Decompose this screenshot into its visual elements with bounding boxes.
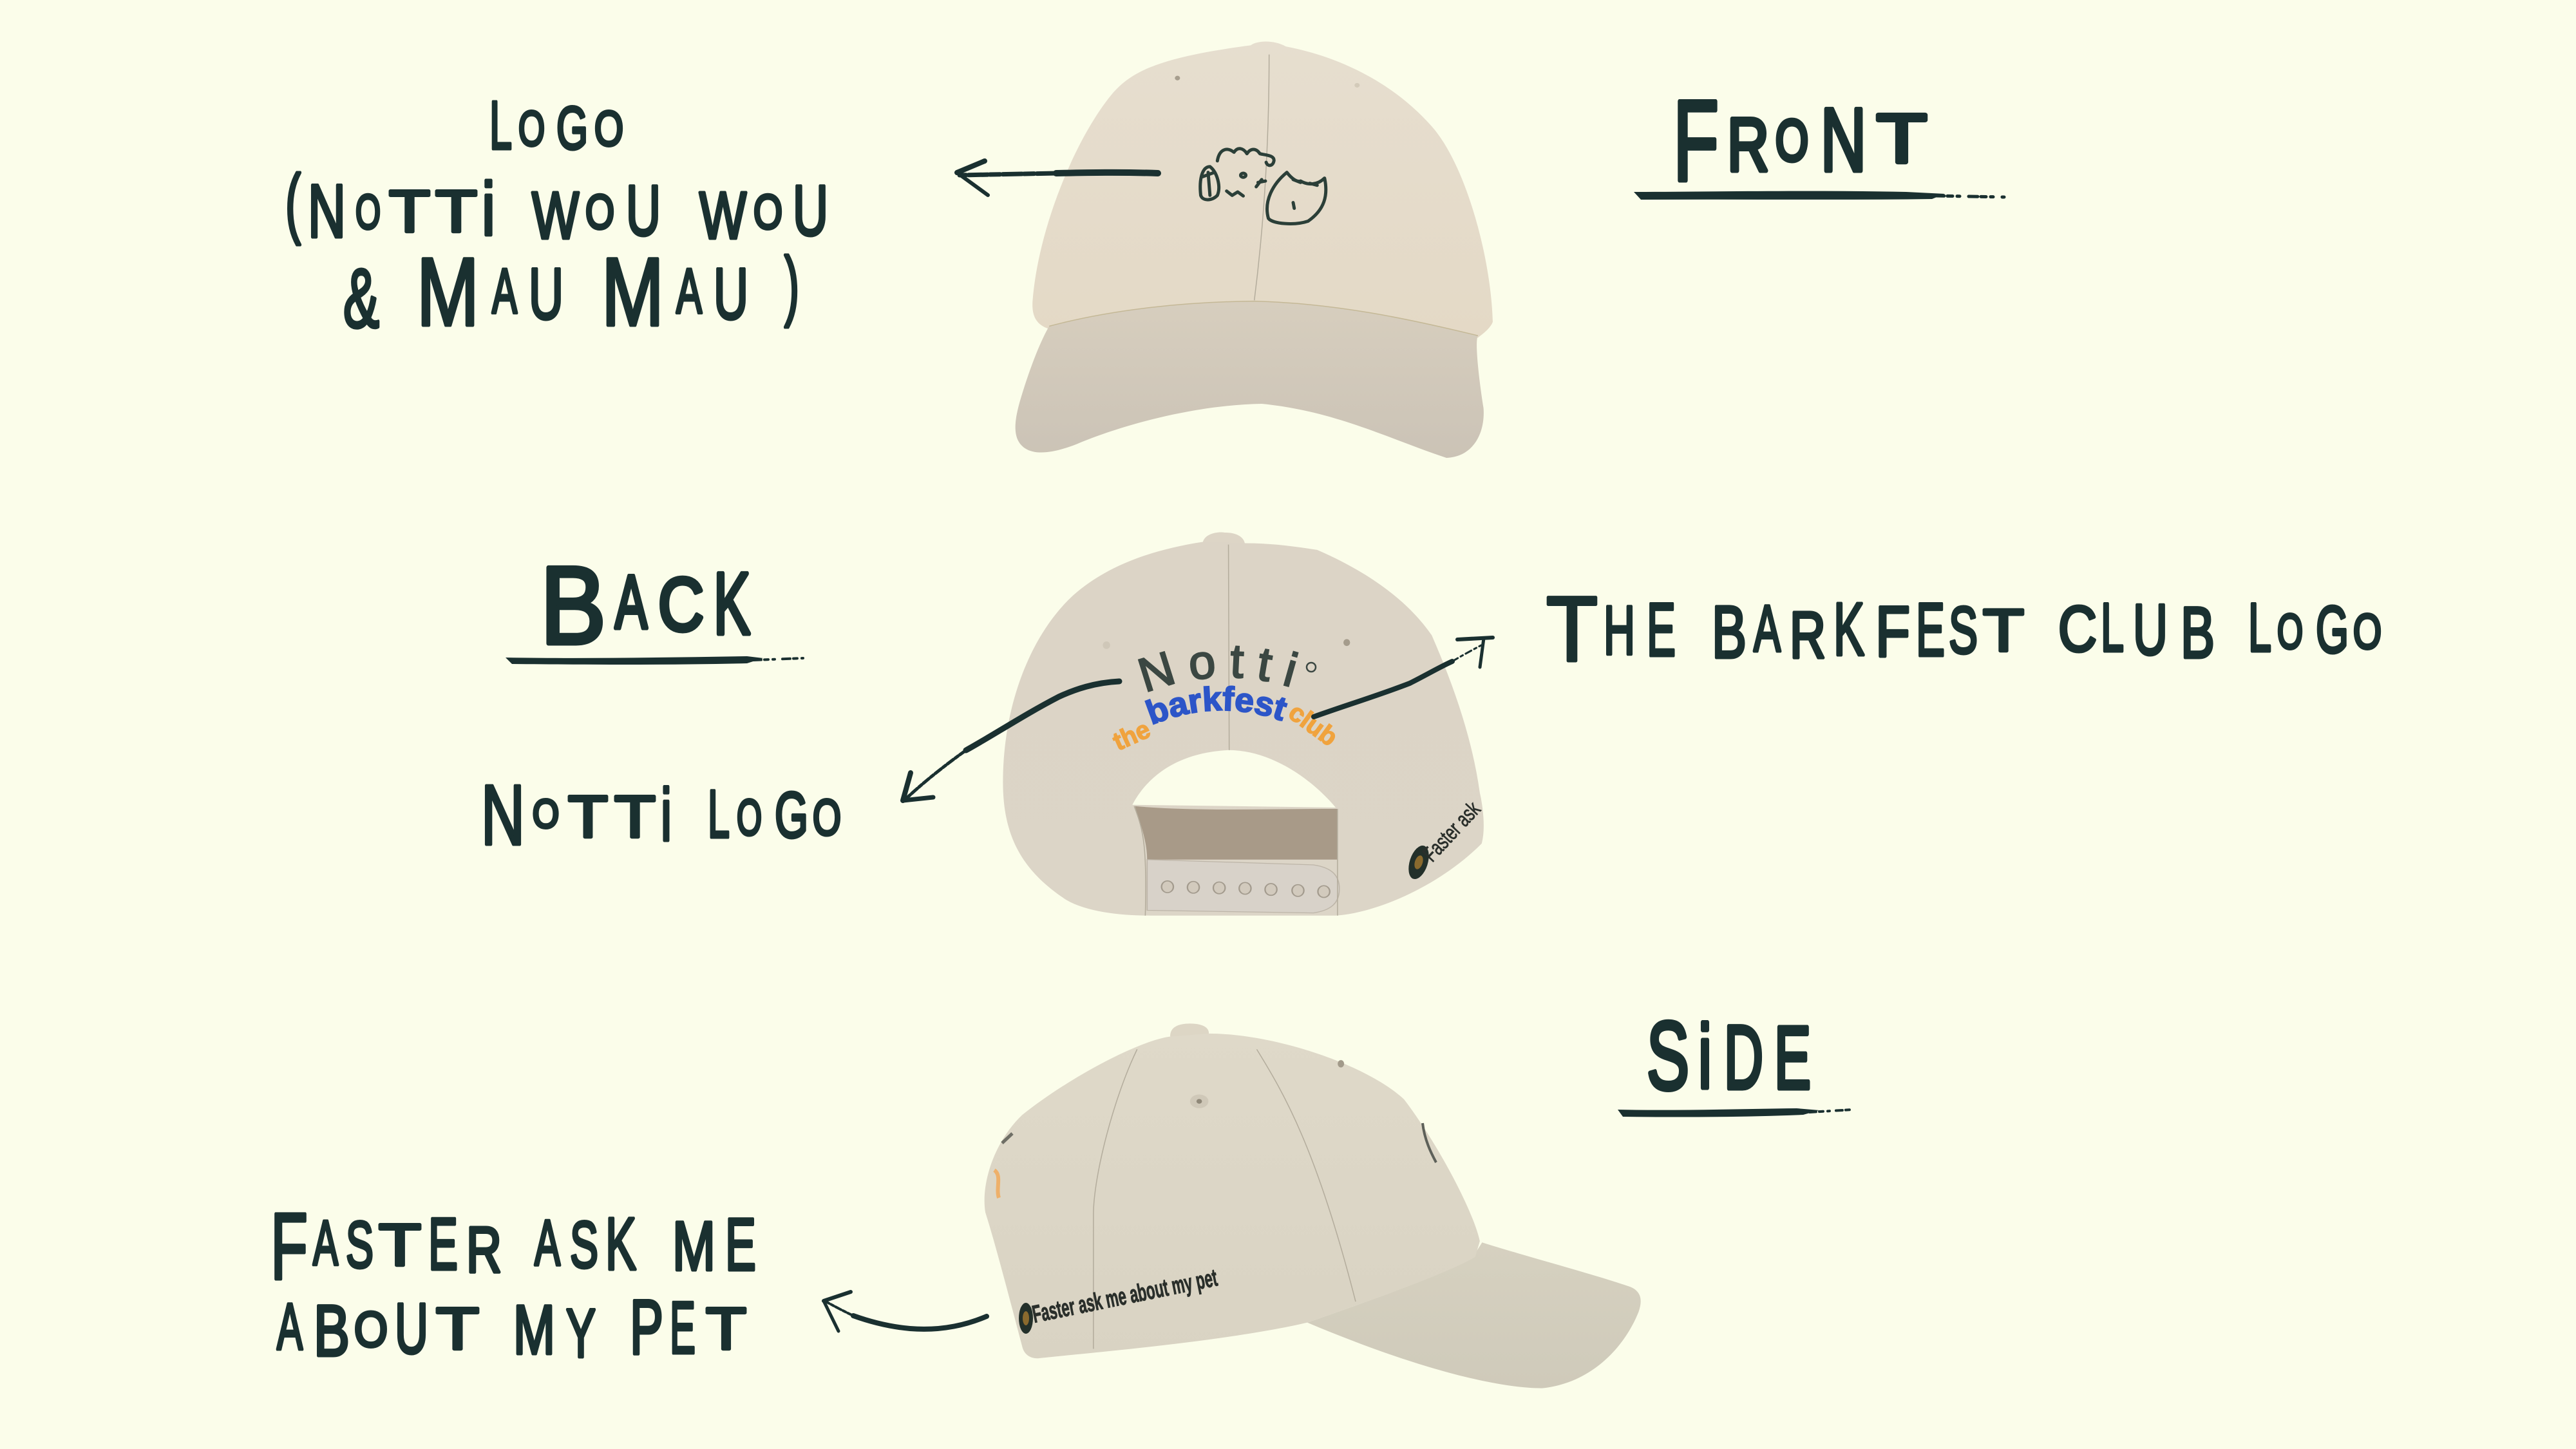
- heading: Notti logo label: G: [775, 779, 808, 851]
- heading: Faster ask me about my pet label: A: [535, 1207, 560, 1279]
- heading: The barkfest club logo label: A: [1754, 592, 1781, 665]
- heading: Front: F: [1673, 77, 1719, 205]
- heading: The barkfest club logo label: T: [1983, 597, 2024, 664]
- heading: Logo label: U: [626, 171, 661, 251]
- heading: Faster ask me about my pet label: E: [428, 1204, 458, 1285]
- embroidery: barkfest edge: [994, 1170, 999, 1198]
- heading: Faster ask me about my pet label: O: [354, 1302, 388, 1358]
- heading: Back: A: [615, 560, 647, 644]
- heading: Back: C: [658, 562, 704, 647]
- embroidery: the barkfest club logo: the: [1109, 715, 1155, 756]
- heading: Faster ask me about my pet label: M: [513, 1291, 555, 1368]
- crown: [985, 1034, 1480, 1358]
- heading: Side: E: [1774, 1009, 1811, 1108]
- heading: Side: i: [1698, 1006, 1712, 1107]
- hat: front view: [1016, 42, 1493, 458]
- heading: Front: O: [1776, 109, 1808, 173]
- heading: Logo label: O: [753, 185, 782, 239]
- heading: Logo label: &: [343, 251, 379, 345]
- heading: Logo label: L: [489, 88, 512, 164]
- crown button: [1170, 1023, 1209, 1037]
- embroidery: Faster ask me side text: [1405, 797, 1486, 882]
- embroidery: Faster ask me about my pet: [1019, 1264, 1220, 1334]
- heading: Logo label: T: [435, 179, 477, 245]
- heading: Notti logo label: T: [568, 784, 608, 850]
- heading: The barkfest club logo label: B: [2181, 592, 2215, 673]
- heading: Logo label: A: [492, 256, 517, 327]
- underline: Side: [1618, 1108, 1853, 1117]
- heading: Logo label: O: [594, 102, 623, 156]
- heading: Faster ask me about my pet label: P: [630, 1284, 663, 1370]
- heading: Logo label: O: [518, 102, 545, 156]
- heading: Front: N: [1821, 90, 1866, 190]
- heading: Front: T: [1877, 100, 1927, 177]
- heading: Faster ask me about my pet label: T: [706, 1296, 746, 1362]
- heading: Faster ask me about my pet label: Y: [566, 1294, 596, 1372]
- heading: The barkfest club logo label: G: [2316, 592, 2349, 667]
- underline: Front: [1634, 191, 2004, 200]
- heading: Front: [1673, 77, 1927, 205]
- crown: [1032, 42, 1493, 337]
- embroidery: the barkfest club logo: [1109, 685, 1343, 756]
- heading: Faster ask me about my pet label: R: [466, 1214, 502, 1286]
- embroidery: the barkfest club logo: barkfest: [1144, 685, 1288, 725]
- heading: Side: S: [1647, 1001, 1689, 1110]
- embroidery: Faster ask me side text: Faster ask: [1418, 797, 1486, 866]
- heading: Faster ask me about my pet label: U: [395, 1289, 428, 1368]
- heading: Faster ask me about my pet label: T: [379, 1213, 421, 1278]
- heading: Faster ask me about my pet label: S: [346, 1208, 374, 1282]
- heading: The barkfest club logo label: T: [1546, 578, 1598, 681]
- arrow: Faster ask me pointer: [824, 1292, 987, 1331]
- heading: Notti logo label: i: [661, 774, 672, 857]
- heading: Faster ask me about my pet label: [270, 1194, 756, 1372]
- heading: The barkfest club logo label: H: [1604, 591, 1635, 669]
- heading: Back: [540, 544, 750, 667]
- heading: Logo label: T: [389, 179, 430, 245]
- heading: Logo label: (: [285, 159, 301, 245]
- heading: Logo label: N: [308, 169, 346, 253]
- heading: Notti logo label: L: [708, 777, 730, 852]
- heading: Faster ask me about my pet label: A: [313, 1208, 338, 1278]
- heading: The barkfest club logo label: C: [2058, 593, 2097, 665]
- strap opening: [1132, 750, 1336, 808]
- heading: Back: B: [540, 544, 606, 667]
- arrow: barkfest club logo pointer: [1314, 638, 1493, 717]
- heading: Logo label: [285, 88, 828, 346]
- heading: Logo label: i: [482, 167, 495, 251]
- heading: The barkfest club logo label: E: [1647, 587, 1676, 672]
- heading: Front: R: [1727, 102, 1769, 187]
- heading: The barkfest club logo label: L: [2101, 589, 2124, 666]
- inner band: [1135, 806, 1338, 860]
- hat: back view: [1003, 532, 1486, 916]
- heading: Notti logo label: T: [614, 784, 656, 850]
- heading: Logo label: M: [601, 238, 664, 346]
- heading: The barkfest club logo label: B: [1712, 591, 1747, 674]
- heading: Logo label: M: [417, 238, 479, 346]
- heading: Side: D: [1724, 1007, 1763, 1108]
- heading: Faster ask me about my pet label: B: [314, 1291, 350, 1371]
- heading: Faster ask me about my pet label: S: [570, 1208, 598, 1282]
- crown button: [1202, 532, 1245, 546]
- heading: The barkfest club logo label: O: [2353, 605, 2382, 659]
- heading: Faster ask me about my pet label: K: [605, 1203, 636, 1285]
- brim: [1016, 301, 1484, 458]
- heading: Faster ask me about my pet label: M: [672, 1207, 715, 1285]
- heading: The barkfest club logo label: K: [1833, 587, 1864, 671]
- heading: Notti logo label: O: [737, 789, 762, 846]
- embroidery: front logo edge: [1423, 1123, 1436, 1162]
- heading: Logo label: W: [532, 178, 579, 252]
- heading: Logo label: U: [714, 254, 748, 334]
- arrow: logo pointer: [957, 161, 1158, 195]
- heading: Notti logo label: O: [533, 792, 559, 837]
- heading: Logo label: U: [793, 171, 828, 251]
- arrow: Notti logo pointer: [903, 681, 1119, 800]
- heading: Faster ask me about my pet label: T: [436, 1296, 479, 1362]
- heading: Faster ask me about my pet label: E: [725, 1204, 756, 1286]
- heading: Notti logo label: O: [813, 789, 841, 846]
- embroidery: Notti logo: Notti: [1137, 645, 1298, 692]
- strap: [1147, 860, 1340, 913]
- heading: Faster ask me about my pet label: F: [270, 1194, 308, 1300]
- heading: Notti logo label: N: [481, 768, 525, 862]
- heading: Faster ask me about my pet label: A: [277, 1290, 303, 1363]
- heading: The barkfest club logo label: F: [1875, 592, 1910, 672]
- heading: The barkfest club logo label: U: [2133, 590, 2168, 670]
- heading: Faster ask me about my pet label: E: [670, 1287, 696, 1369]
- heading: Logo label: U: [529, 254, 564, 334]
- heading: Logo label: G: [556, 94, 588, 162]
- heading: Logo label: ): [784, 242, 799, 328]
- heading: The barkfest club logo label: L: [2248, 589, 2271, 666]
- embroidery: the barkfest club logo: club: [1283, 698, 1343, 752]
- heading: The barkfest club logo label: E: [1916, 587, 1945, 672]
- brim: [1307, 1242, 1641, 1388]
- heading: The barkfest club logo label: R: [1790, 598, 1826, 672]
- heading: Logo label: O: [585, 185, 614, 239]
- embroidery: Faster ask me about my pet: Faster ask me about my pet: [1030, 1264, 1220, 1329]
- heading: Logo label: W: [699, 178, 746, 252]
- heading: Logo label: O: [355, 185, 381, 239]
- hat: side view: [985, 1023, 1641, 1388]
- icon: dog and cat logo: [1200, 149, 1326, 223]
- heading: The barkfest club logo label: S: [1949, 593, 1978, 667]
- heading: Back: K: [714, 554, 750, 652]
- heading: Logo label: A: [676, 256, 702, 327]
- underline: Back: [506, 656, 803, 665]
- heading: The barkfest club logo label: O: [2277, 605, 2303, 659]
- crown: [1003, 542, 1484, 916]
